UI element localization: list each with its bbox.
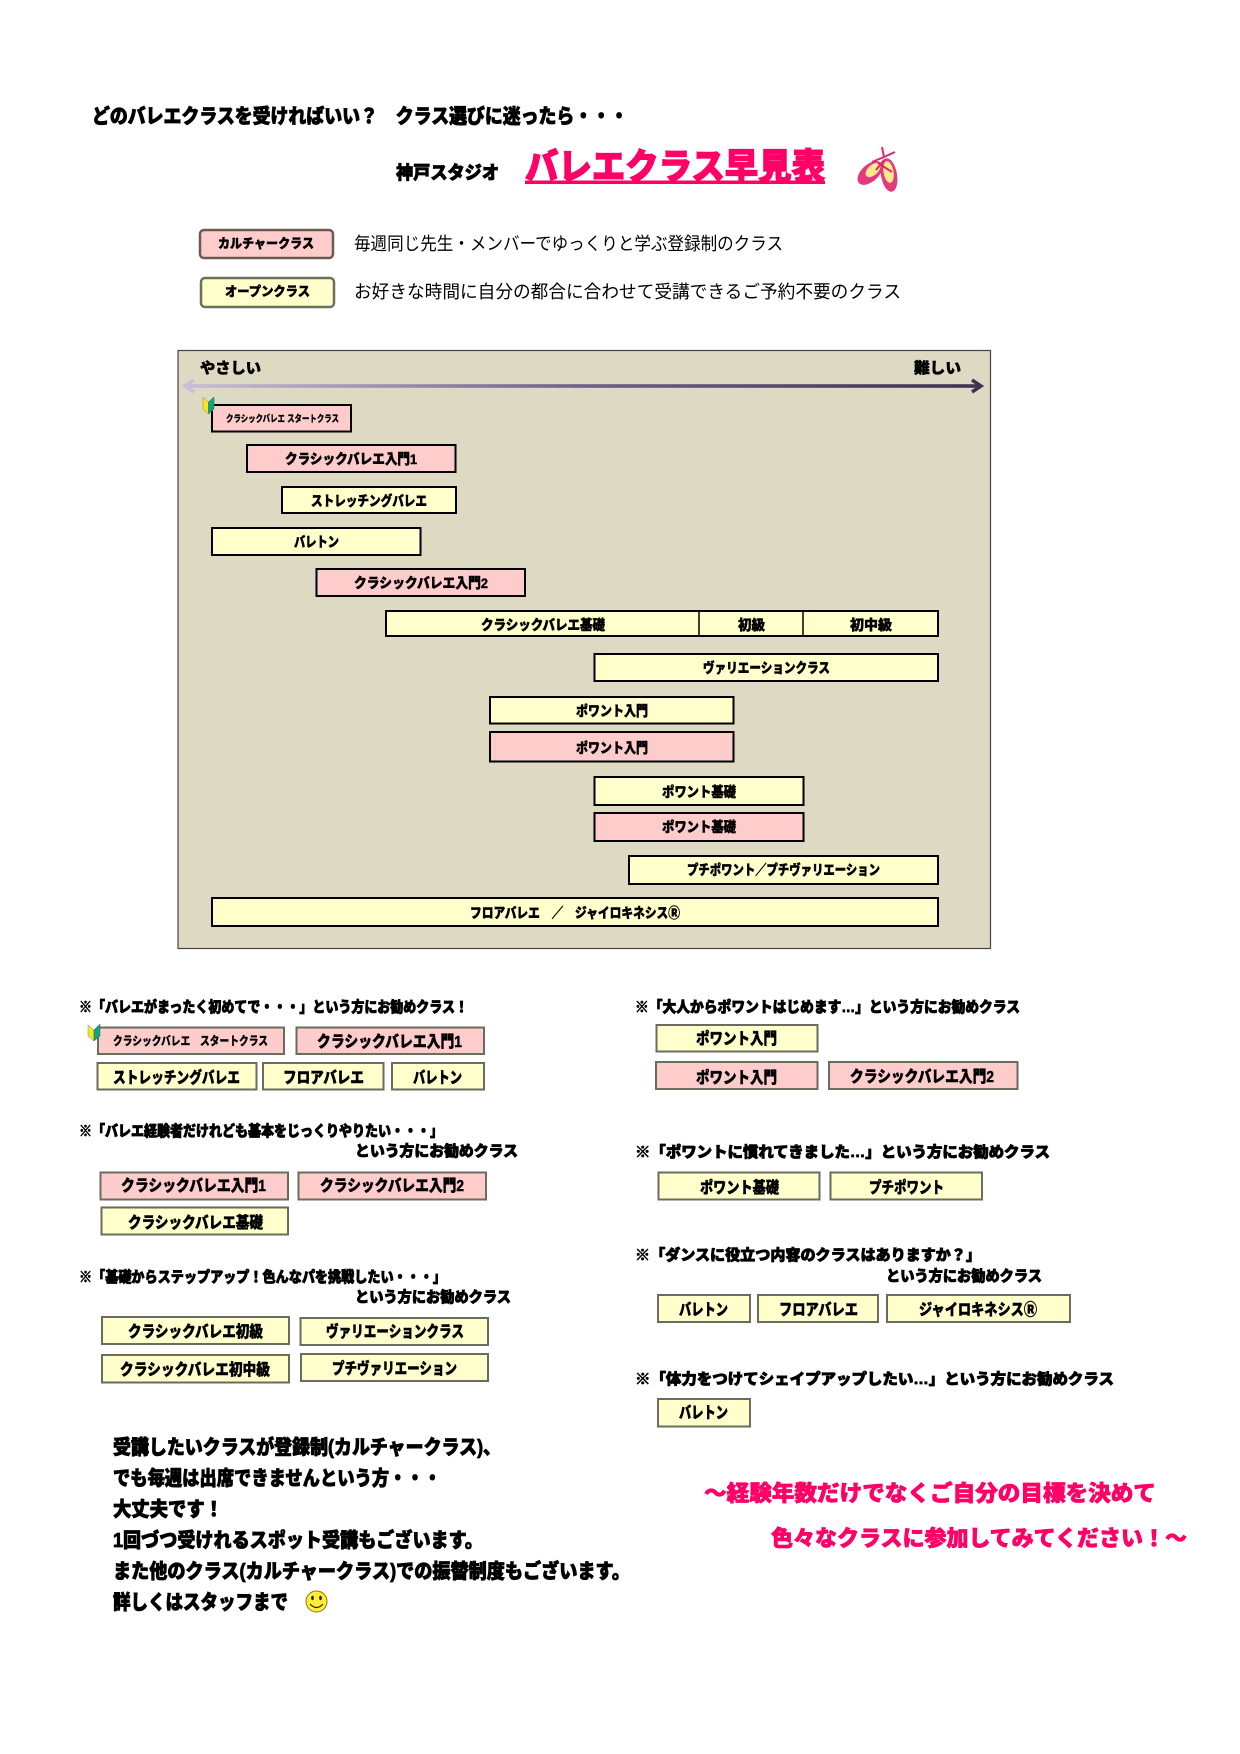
- class: elementary: [102, 1317, 289, 1344]
- callout: pink closing message: [704, 1481, 1187, 1551]
- class: start class: クラシックバレエ スタートクラス: [113, 1033, 268, 1048]
- section: step up: [79, 1268, 511, 1382]
- arrow: difficulty scale: [185, 380, 981, 392]
- class: petit variation: プチヴァリエーション: [332, 1359, 457, 1378]
- bar: basics, elementary, intermediate: 初級: [738, 617, 765, 633]
- heading: ※「体力をつけてシェイプアップしたい…」という方にお勧めクラス: [635, 1370, 1114, 1388]
- class: petit pointe: [830, 1172, 982, 1200]
- heading: ※「バレエ経験者だけれども基本をじっくりやりたい・・・」: [79, 1122, 443, 1140]
- text block: spot lessons note: 1回づつ受けれるスポット受講もございます。: [113, 1528, 483, 1552]
- legend: open class: [201, 278, 334, 307]
- bar: petit pointe / petit variation: プチポワント／プチヴァリエーション: [687, 862, 880, 878]
- class: pointe intro culture: [656, 1062, 818, 1089]
- icon: smiley: [306, 1591, 327, 1612]
- class: pointe intro open: ポワント入門: [696, 1029, 777, 1048]
- label: easy: やさしい: [200, 360, 261, 377]
- section: adult pointe starters: [635, 998, 1020, 1089]
- bar: pointe basics culture: ポワント基礎: [662, 819, 736, 835]
- class: intro 2: [829, 1062, 1018, 1089]
- bar: pointe intro open: [490, 697, 734, 724]
- class: lower intermediate: [102, 1355, 289, 1382]
- class: basics: [102, 1208, 288, 1234]
- bar: balleton: バレトン: [294, 534, 339, 550]
- legend text: open class: お好きな時間に自分の都合に合わせて受講できるご予約不要のクラス: [354, 282, 901, 302]
- heading: ※「ポワントに慣れてきました…」という方にお勧めクラス: [635, 1143, 1050, 1161]
- text block: spot lessons note: また他のクラス(カルチャークラス)での振替制度もございます。: [113, 1559, 630, 1583]
- class: intro 1: クラシックバレエ入門1: [317, 1033, 462, 1051]
- class: balleton: バレトン: [413, 1069, 462, 1087]
- heading: Kobe studio: 神戸スタジオ: [396, 162, 499, 183]
- icon: beginner mark: [203, 397, 214, 414]
- text block: spot lessons note: 受講したいクラスが登録制(カルチャークラス)、: [113, 1435, 501, 1459]
- class: start class: [98, 1028, 284, 1054]
- bar: variation: ヴァリエーションクラス: [703, 660, 830, 676]
- bar: intro 1: [247, 445, 456, 472]
- class: balleton: バレトン: [679, 1301, 728, 1319]
- section: complete beginners: [79, 998, 484, 1090]
- class: elementary: クラシックバレエ初級: [128, 1322, 263, 1341]
- bar: start class: クラシックバレエ スタートクラス: [226, 413, 339, 425]
- class: petit variation: [301, 1354, 488, 1381]
- bar: stretching: ストレッチングバレエ: [311, 493, 427, 509]
- class: pointe intro culture: ポワント入門: [696, 1068, 777, 1087]
- class: intro 1: [100, 1172, 288, 1200]
- bar: basics, elementary, intermediate: クラシックバレエ基礎: [481, 617, 605, 633]
- section: useful for dance: [635, 1246, 1070, 1322]
- bar: pointe intro culture: [490, 732, 734, 762]
- class: variation: ヴァリエーションクラス: [326, 1322, 464, 1341]
- text block: spot lessons note: 大丈夫です！: [113, 1498, 223, 1521]
- icon: beginner mark: [88, 1024, 100, 1041]
- bar: floor ballet / gyrokinesis: フロアバレエ ／ ジャイロキネシスⓇ: [470, 905, 680, 921]
- legend text: culture class: 毎週同じ先生・メンバーでゆっくりと学ぶ登録制のクラス: [354, 234, 783, 254]
- text block: spot lessons note: [113, 1435, 630, 1614]
- heading: ※「大人からポワントはじめます…」という方にお勧めクラス: [635, 998, 1020, 1016]
- class: petit pointe: プチポワント: [869, 1178, 944, 1197]
- legend: open class: オープンクラス: [225, 284, 310, 299]
- class: floor ballet: フロアバレエ: [779, 1301, 858, 1319]
- bar: pointe basics open: ポワント基礎: [662, 784, 736, 800]
- class: floor ballet: フロアバレエ: [283, 1069, 364, 1087]
- main title: バレエクラス早見表: [525, 146, 825, 187]
- class: intro 2: クラシックバレエ入門2: [320, 1177, 464, 1195]
- chart background: [178, 350, 990, 948]
- bar: basics, elementary, intermediate: 初中級: [850, 617, 892, 633]
- label: difficult: 難しい: [914, 359, 961, 377]
- class: intro 1: [296, 1028, 484, 1054]
- class: stretching: ストレッチングバレエ: [113, 1068, 240, 1087]
- bar: variation: [594, 654, 938, 681]
- class: floor ballet: [758, 1295, 878, 1322]
- heading: ※「バレエがまったく初めてで・・・」という方にお勧めクラス！: [79, 998, 468, 1016]
- bar: intro 2: [316, 569, 525, 596]
- class: variation: [300, 1318, 488, 1345]
- class: basics: クラシックバレエ基礎: [128, 1213, 263, 1232]
- class: balleton: バレトン: [679, 1404, 728, 1422]
- class: balleton: [392, 1063, 484, 1090]
- class: lower intermediate: クラシックバレエ初中級: [120, 1360, 270, 1379]
- class: stretching: [98, 1063, 256, 1090]
- class: floor ballet: [263, 1063, 384, 1090]
- panel: difficulty chart: [178, 350, 990, 948]
- bar: balleton: [212, 528, 420, 555]
- legend: culture class: カルチャークラス: [218, 236, 314, 251]
- bar: pointe basics open: [594, 777, 804, 805]
- class: balleton: [658, 1399, 750, 1426]
- bar: intro 2: クラシックバレエ入門2: [354, 575, 488, 591]
- bar: petit pointe / petit variation: [629, 856, 938, 884]
- class: intro 1: クラシックバレエ入門1: [121, 1177, 266, 1195]
- title: intro question: どのバレエクラスを受ければいい？ クラス選びに迷ったら・・・: [92, 104, 628, 128]
- bar: pointe basics culture: [594, 813, 804, 841]
- class: balleton: [658, 1295, 750, 1322]
- class: gyrokinesis: [887, 1295, 1070, 1322]
- heading line 2: という方にお勧めクラス: [355, 1142, 518, 1160]
- callout: pink closing message: 色々なクラスに参加してみてください！～: [771, 1526, 1187, 1551]
- class: intro 2: クラシックバレエ入門2: [850, 1068, 994, 1086]
- section: used to pointe: [635, 1143, 1050, 1200]
- bar: pointe intro open: ポワント入門: [576, 703, 648, 719]
- callout: pink closing message: ～経験年数だけでなくご自分の目標を決めて: [704, 1481, 1156, 1506]
- bar: floor ballet / gyrokinesis: [212, 898, 938, 926]
- heading line 2: という方にお勧めクラス: [886, 1267, 1042, 1285]
- bar: intro 1: クラシックバレエ入門1: [285, 451, 417, 467]
- class: intro 2: [298, 1172, 486, 1200]
- bar: stretching: [282, 487, 456, 513]
- class: pointe basics: [658, 1172, 820, 1200]
- class: pointe intro open: [656, 1025, 818, 1052]
- bar: basics, elementary, intermediate: [386, 611, 938, 636]
- heading: ※「基礎からステップアップ！色んなパを挑戦したい・・・」: [79, 1268, 446, 1286]
- bar: pointe intro culture: ポワント入門: [576, 740, 648, 756]
- section: shape up: [635, 1370, 1114, 1426]
- text block: spot lessons note: 詳しくはスタッフまで: [113, 1590, 288, 1614]
- legend: culture class: [200, 230, 333, 258]
- class: pointe basics: ポワント基礎: [700, 1178, 779, 1197]
- heading: ※「ダンスに役立つ内容のクラスはありますか？」: [635, 1246, 981, 1264]
- class: gyrokinesis: ジャイロキネシスⓇ: [919, 1301, 1037, 1319]
- section: experienced, basics: [79, 1122, 518, 1234]
- heading line 2: という方にお勧めクラス: [355, 1288, 511, 1306]
- icon: ballet shoes: [853, 147, 900, 193]
- text block: spot lessons note: でも毎週は出席できませんという方・・・: [113, 1466, 441, 1490]
- bar: start class: [212, 405, 351, 432]
